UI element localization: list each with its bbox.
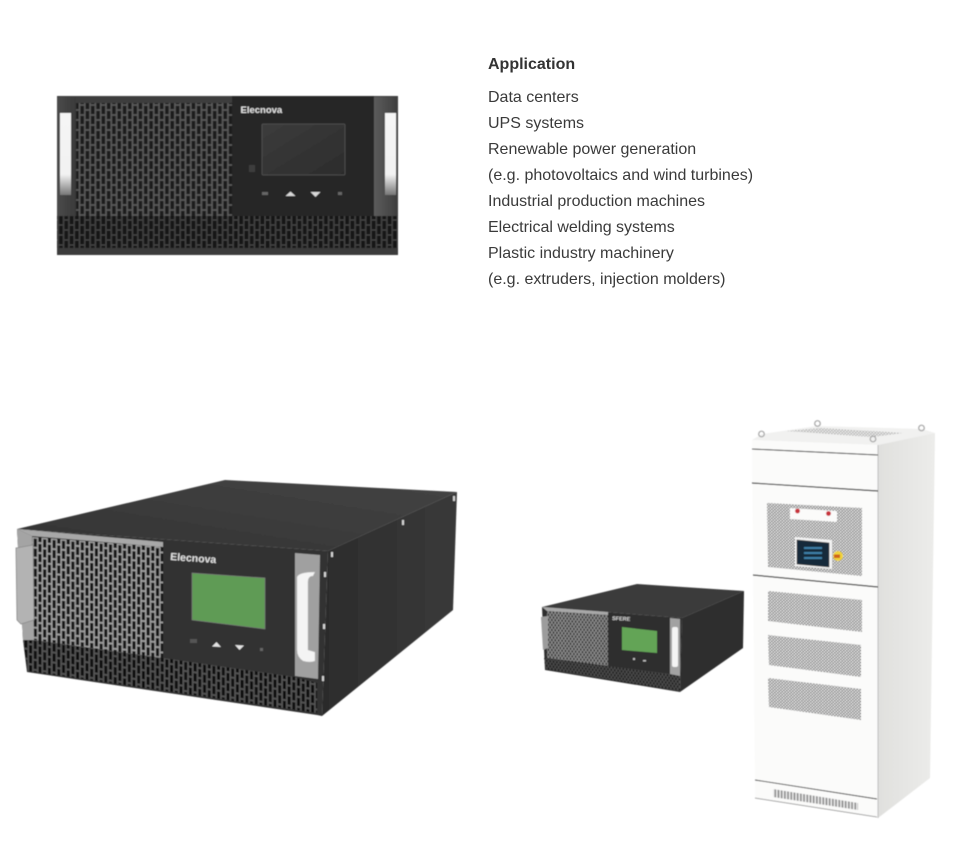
large unit: rivets [322, 496, 455, 681]
small unit: upper grille [547, 611, 608, 666]
cabinet: vent panel 3 [768, 678, 861, 720]
small unit: lower grille [544, 658, 680, 691]
cabinet: front face [752, 440, 878, 818]
device: white cabinet [752, 421, 935, 818]
text block: application list: (e.g. photovoltaics and wind turbines) [488, 167, 753, 184]
device: large angled Elecnova unit [16, 480, 457, 716]
large unit: front face [17, 529, 328, 716]
cabinet: control panel grille [767, 503, 862, 576]
small unit: left handle [541, 616, 548, 650]
small unit: right white handle [672, 627, 678, 667]
cabinet: blue touch display [797, 540, 829, 567]
small unit: front face [542, 607, 682, 692]
large unit: gray top strip [17, 529, 163, 547]
large unit: right gray strip [295, 553, 320, 679]
cabinet: bottom vent slots [773, 789, 858, 810]
front view: right side strip and white handle [374, 97, 398, 216]
text block: application list: Data centers [488, 89, 579, 106]
small unit: gray top strip [542, 607, 608, 615]
large unit: buttons [190, 639, 263, 651]
front view: lower ventilation grille [57, 216, 398, 248]
front view: status indicator [249, 165, 255, 172]
small unit: brand name: SFERE [612, 616, 631, 623]
heading: application: Application [488, 56, 575, 73]
cabinet: lifting eyes [759, 421, 924, 442]
cabinet: display surround [795, 537, 832, 569]
cabinet: indicator area [790, 508, 837, 522]
small unit: right gray strip [670, 618, 680, 676]
front view: buttons [262, 192, 342, 197]
text block: application list: Renewable power generation [488, 141, 696, 158]
large unit: right side face [322, 492, 457, 716]
cabinet: vent panel 1 [768, 591, 862, 632]
device: small angled SFERE unit [541, 584, 744, 692]
large unit: green display [192, 573, 265, 629]
small unit: green display [622, 627, 657, 653]
front view: left side strip and white handle [57, 97, 76, 217]
large unit: upper grille [32, 537, 163, 658]
text block: application list: Industrial production machines [488, 193, 705, 210]
text block: application list [488, 56, 753, 288]
large unit: top face [17, 480, 457, 551]
device: front view of Elecnova unit [57, 96, 398, 255]
large unit: left handle [16, 545, 34, 624]
front view: dark control panel [232, 96, 374, 216]
large unit: right white handle [297, 572, 315, 662]
cabinet: right side face [878, 433, 935, 818]
front view: display [262, 124, 345, 175]
small unit: top face [542, 584, 744, 618]
small unit: right side face [680, 591, 744, 692]
large unit: left gray strip [17, 529, 36, 641]
small unit: buttons [633, 658, 646, 662]
front view: brand name: Elecnova [240, 105, 283, 116]
text block: application list: UPS systems [488, 115, 584, 132]
cabinet: vent panel 2 [768, 635, 861, 677]
text block: application list: Plastic industry machinery [488, 245, 674, 262]
cabinet: top face [752, 426, 935, 445]
text block: application list: Electrical welding systems [488, 219, 675, 236]
cabinet: red indicator lights [795, 509, 831, 516]
large unit: brand name: Elecnova [170, 551, 217, 566]
front view: upper ventilation grille [76, 103, 232, 216]
cabinet: yellow rotary switch [833, 551, 843, 561]
text block: application list: (e.g. extruders, injection molders) [488, 271, 725, 288]
cabinet: top vent [786, 428, 903, 437]
large unit: lower grille [23, 640, 317, 713]
